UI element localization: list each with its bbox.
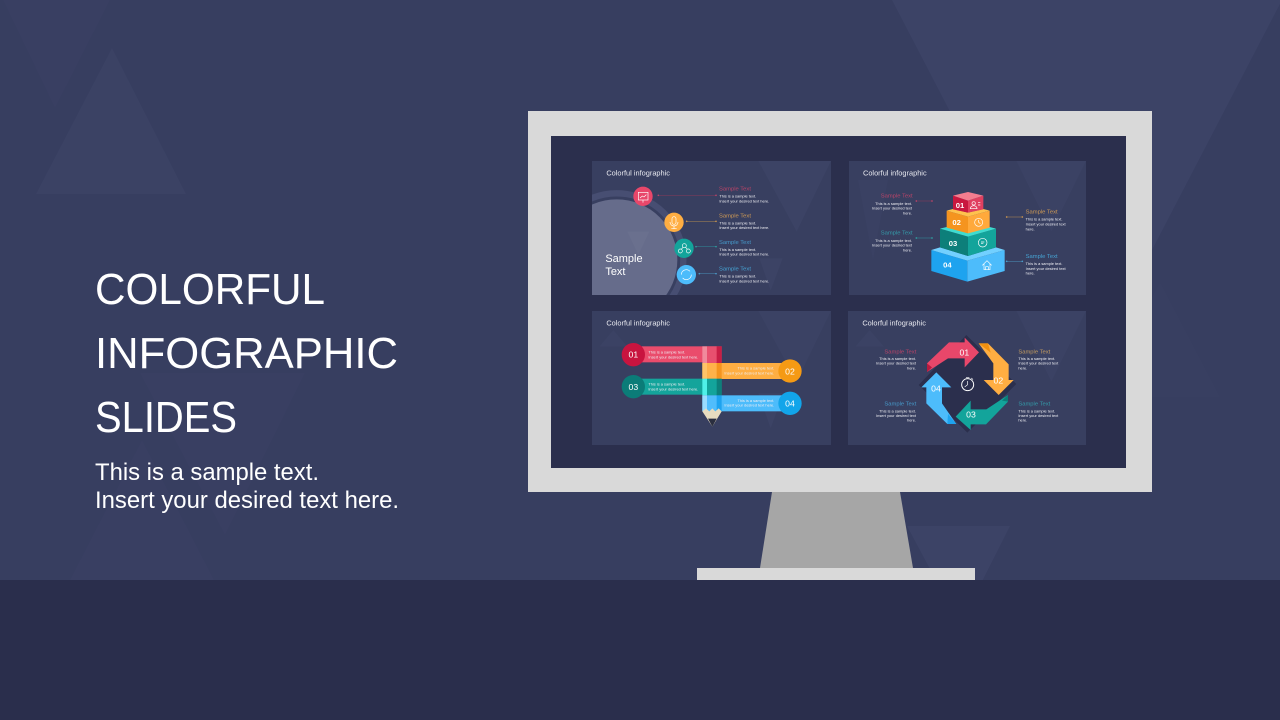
bottom band [0, 580, 1280, 720]
label 2: This is a sample text. [1018, 356, 1055, 361]
arrow 03 [956, 395, 1008, 430]
ribbon 03: Insert your desired text here. [648, 386, 698, 391]
connector lines [915, 200, 1023, 262]
label 1 [876, 349, 917, 370]
pencil [702, 346, 722, 427]
label 2: This is a sample text. [1026, 217, 1063, 222]
item 2 text: Sample Text [719, 213, 751, 219]
pyramid level 4: 04 [943, 260, 952, 269]
label 2 [1026, 210, 1066, 231]
label 1: Insert your desired text [872, 206, 913, 211]
label 3 [872, 231, 913, 252]
label 2 [1018, 349, 1059, 370]
label 3: Insert your desired text [872, 243, 913, 248]
label 2: here. [1026, 226, 1035, 231]
label 1: This is a sample text. [879, 356, 916, 361]
label 1: This is a sample text. [875, 201, 912, 206]
title: INFOGRAPHIC [95, 329, 398, 378]
heading: Colorful infographic [863, 171, 927, 178]
pyramid level 1 [953, 192, 983, 213]
ribbon 02: This is a sample text. [737, 366, 774, 371]
ribbon 04 [702, 392, 802, 415]
pyramid level 2: 02 [952, 218, 961, 227]
arrow 03: 03 [966, 409, 976, 419]
label 3: Sample Text [1018, 401, 1051, 407]
arrow 01: 01 [960, 347, 969, 357]
item 4 text [719, 267, 769, 283]
panel: pencil slide [592, 311, 831, 445]
arrow 01 [927, 338, 979, 372]
label 4: here. [1026, 271, 1035, 276]
ribbon 02: 02 [785, 366, 795, 376]
label 4: This is a sample text. [1026, 261, 1063, 266]
label 4: Sample Text [1026, 254, 1058, 260]
monitor frame [528, 111, 1152, 492]
monitor base [697, 568, 975, 580]
label 2: here. [1018, 365, 1027, 370]
ribbon 01: Insert your desired text here. [648, 354, 698, 359]
item 2 text: This is a sample text. [719, 220, 756, 225]
label 4 [876, 401, 917, 423]
label 1: Insert your desired text [876, 361, 917, 366]
label 3: This is a sample text. [875, 238, 912, 243]
item 3 text [719, 240, 769, 257]
arrow 02 [979, 343, 1014, 395]
label 3: Sample Text [881, 231, 913, 237]
icon: presentation [633, 187, 653, 206]
label 1: here. [903, 210, 912, 215]
item 4 text: Insert your desired text here. [719, 278, 769, 283]
item 1 text: Sample Text [719, 187, 751, 193]
label 2: Insert your desired text [1018, 361, 1059, 366]
connector lines [657, 194, 717, 274]
monitor screen [551, 136, 1126, 468]
label 1 [872, 194, 913, 215]
item 2 text: Insert your desired text here. [719, 225, 769, 230]
pyramid level 2 [947, 209, 990, 233]
label 4: here. [907, 418, 916, 423]
pyramid level 1: 01 [956, 201, 965, 210]
label 4: Sample Text [884, 401, 917, 407]
title: COLORFUL [95, 265, 325, 314]
heading: Colorful infographic [862, 321, 927, 328]
icon: refresh [677, 265, 696, 284]
item 1 text [719, 187, 769, 203]
heading: Colorful infographic [606, 171, 671, 178]
label 3: here. [903, 247, 912, 252]
monitor stand [760, 492, 913, 568]
title: SLIDES [95, 393, 237, 442]
label 4: Insert your desired text [876, 413, 917, 418]
cycle backing diamond [919, 335, 1016, 433]
label 4: This is a sample text. [879, 408, 916, 413]
label 3: Insert your desired text [1018, 413, 1059, 418]
subtitle [95, 459, 399, 514]
ribbon 01: 01 [629, 350, 638, 360]
label 2: Insert your desired text [1026, 222, 1066, 227]
ribbon 01: This is a sample text. [648, 350, 685, 355]
ribbon 04: 04 [785, 399, 795, 409]
label 3 [1018, 401, 1059, 423]
subtitle: Insert your desired text here. [95, 487, 399, 514]
label 1: Sample Text [881, 194, 913, 200]
big circle label [605, 253, 643, 278]
arrow 04 [921, 372, 956, 424]
ribbon 03: 03 [629, 382, 638, 392]
ribbon 01 [622, 343, 722, 366]
item 1 text: This is a sample text. [719, 194, 756, 199]
icon: microphone [664, 213, 684, 232]
item 4 text: Sample Text [719, 267, 751, 273]
pyramid level 3: 03 [949, 239, 957, 248]
icon: stopwatch [962, 377, 974, 391]
label 1: here. [907, 365, 916, 370]
label 3: here. [1018, 418, 1027, 423]
label 2: Sample Text [1018, 349, 1051, 355]
item 1 text: Insert your desired text here. [719, 198, 769, 203]
label 2: Sample Text [1026, 210, 1058, 216]
ribbon 04: Insert your desired text here. [724, 403, 774, 408]
item 2 text [719, 213, 769, 230]
icon: network [674, 239, 694, 258]
item 3 text: Sample Text [719, 240, 751, 246]
ribbon 02: Insert your desired text here. [724, 370, 774, 375]
item 3 text: Insert your desired text here. [719, 252, 769, 257]
big circle label: Text [605, 266, 625, 278]
panel: circular list slide [592, 161, 831, 295]
pyramid level 4 [931, 247, 1005, 282]
panel: cycle arrows slide [848, 311, 1086, 445]
label 3: This is a sample text. [1018, 408, 1055, 413]
arrow 02: 02 [994, 376, 1003, 386]
ribbon 02 [702, 359, 802, 383]
ribbon 03 [622, 375, 722, 398]
item 4 text: This is a sample text. [719, 274, 756, 279]
big circle label: Sample [605, 253, 643, 265]
arrow 04: 04 [931, 384, 941, 394]
item 3 text: This is a sample text. [719, 247, 756, 252]
pyramid level 3 [940, 227, 996, 256]
title [95, 265, 398, 442]
panel: pyramid slide [849, 161, 1086, 295]
subtitle: This is a sample text. [95, 459, 319, 486]
label 1: Sample Text [884, 349, 917, 355]
ribbon 04: This is a sample text. [737, 398, 774, 403]
label 4: Insert your desired text [1026, 266, 1066, 271]
ribbon 03: This is a sample text. [648, 382, 685, 387]
label 4 [1026, 254, 1066, 276]
heading: Colorful infographic [606, 321, 671, 328]
